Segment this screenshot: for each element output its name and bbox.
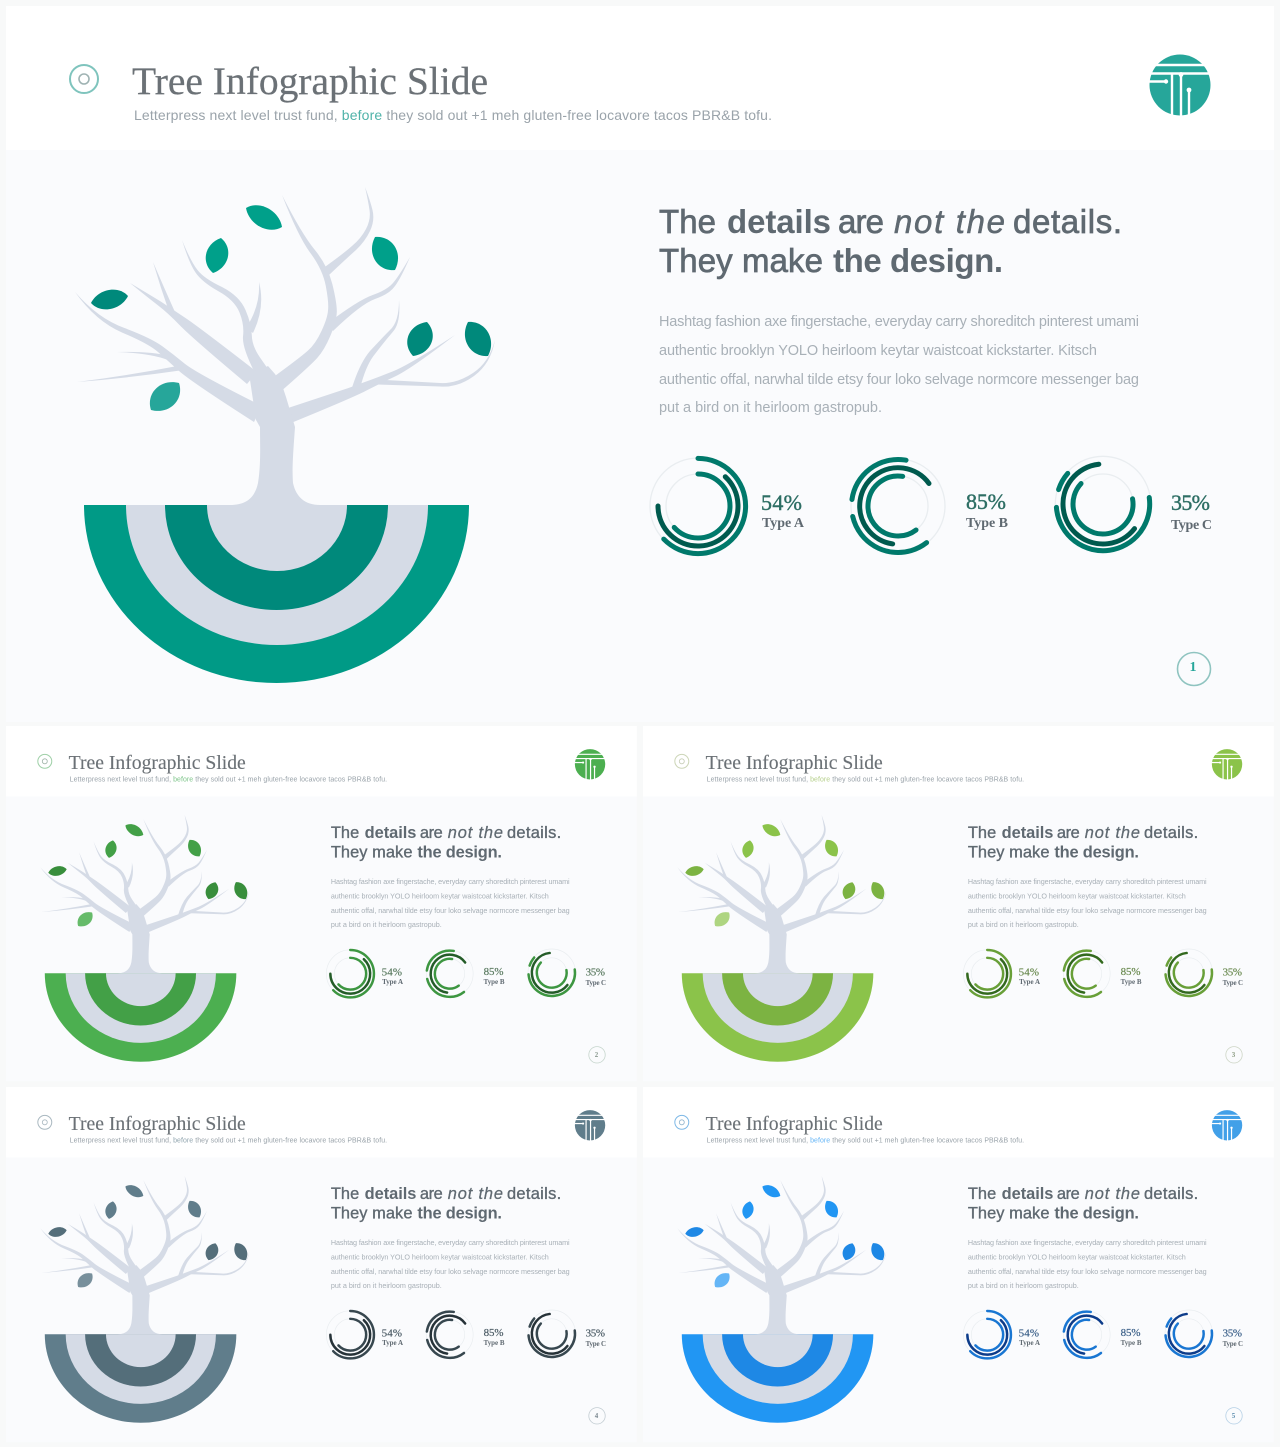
- chart: semicircle roots: [45, 973, 236, 1062]
- page number: [589, 1047, 605, 1063]
- heading: the design.: [1054, 843, 1139, 861]
- donut chart: Type B: [417, 941, 482, 1006]
- label: Type B: [1121, 1327, 1142, 1347]
- body text: [331, 877, 570, 929]
- slide 2: green panel: [6, 726, 637, 1081]
- heading: [659, 203, 1122, 279]
- heading: The: [659, 203, 716, 240]
- body text: put a bird on it heirloom gastropub.: [968, 920, 1079, 929]
- body text: Hashtag fashion axe fingerstache, everyday carry shoreditch pinterest umami: [968, 877, 1207, 886]
- body text: authentic brooklyn YOLO heirloom keytar waistcoat kickstarter. Kitsch: [968, 892, 1186, 901]
- label: Type B: 85%: [484, 966, 503, 978]
- body text: [331, 1238, 570, 1290]
- label: Type A: 54%: [382, 1328, 402, 1340]
- label: Type C: 35%: [1223, 967, 1242, 979]
- body text: authentic brooklyn YOLO heirloom keytar waistcoat kickstarter. Kitsch: [331, 892, 549, 901]
- heading: The: [331, 824, 359, 842]
- body text: authentic offal, narwhal tilde etsy four loko selvage normcore messenger bag: [331, 1267, 570, 1276]
- heading: [331, 1185, 561, 1222]
- heading: They make: [331, 843, 412, 861]
- label: Type A: [761, 490, 805, 531]
- label: Type C: [1223, 1328, 1243, 1348]
- donut chart: Type C: [1044, 445, 1162, 563]
- donut chart: Type A: [641, 449, 755, 563]
- illustration: tree with leaves: [75, 187, 495, 505]
- label: Type A: [382, 967, 403, 986]
- slide 4 background: [6, 1087, 637, 1442]
- icon: target circle: [675, 1115, 689, 1129]
- label: Type B: [484, 1327, 505, 1347]
- label: Type A: Type A: [382, 1339, 403, 1347]
- label: Type B: Type B: [1121, 1339, 1142, 1347]
- body text: authentic brooklyn YOLO heirloom keytar waistcoat kickstarter. Kitsch: [968, 1253, 1186, 1262]
- icon: target circle: [70, 65, 98, 93]
- icon: target circle: [38, 1115, 52, 1129]
- body text: authentic brooklyn YOLO heirloom keytar waistcoat kickstarter. Kitsch: [659, 343, 1097, 359]
- label: Type C: 35%: [1223, 1328, 1242, 1340]
- body text: [659, 314, 1139, 416]
- chart: semicircle roots: [682, 973, 873, 1062]
- heading: details: [1002, 1185, 1053, 1203]
- label: Type B: [1121, 966, 1142, 986]
- body text: put a bird on it heirloom gastropub.: [331, 1281, 442, 1290]
- body text: authentic offal, narwhal tilde etsy four loko selvage normcore messenger bag: [968, 906, 1207, 915]
- icon: tree logo: [1211, 749, 1243, 780]
- page number: [1178, 652, 1210, 686]
- chart: semicircle roots: [682, 1334, 873, 1423]
- title: Tree Infographic Slide: [706, 752, 883, 774]
- slide 5: blue panel: [643, 1087, 1274, 1442]
- title: Tree Infographic Slide: [69, 1113, 246, 1135]
- donut chart: Type B: [1054, 1302, 1119, 1367]
- heading: They make: [331, 1204, 412, 1222]
- label: Type C: Type C: [1171, 518, 1212, 533]
- icon: tree logo: [1211, 1110, 1243, 1141]
- label: Type A: Type A: [762, 516, 805, 531]
- label: Type A: [382, 1328, 403, 1347]
- illustration: tree with leaves: [677, 815, 886, 973]
- body text: authentic brooklyn YOLO heirloom keytar waistcoat kickstarter. Kitsch: [331, 1253, 549, 1262]
- label: Type A: Type A: [382, 978, 403, 986]
- label: Type C: [1223, 967, 1243, 987]
- heading: are: [420, 1185, 443, 1203]
- heading: not the: [1085, 824, 1140, 842]
- label: Type B: Type B: [484, 978, 505, 986]
- heading: not the: [1085, 1185, 1140, 1203]
- heading: the design.: [1054, 1204, 1139, 1222]
- label: Type A: 54%: [761, 490, 802, 515]
- donut chart: Type C: [522, 943, 581, 1002]
- slide 1: teal main panel: [6, 6, 1274, 722]
- slide 3 background: [643, 726, 1274, 1081]
- page number: [1226, 1047, 1242, 1063]
- subtitle: Letterpress next level trust fund, before they sold out +1 meh gluten-free locavore tacos PBR&B tofu.: [70, 777, 387, 784]
- illustration: tree with leaves: [40, 1176, 249, 1334]
- body text: authentic offal, narwhal tilde etsy four loko selvage normcore messenger bag: [968, 1267, 1207, 1276]
- heading: [968, 1185, 1198, 1222]
- page number: 4: [595, 1412, 599, 1420]
- body text: Hashtag fashion axe fingerstache, everyday carry shoreditch pinterest umami: [331, 1238, 570, 1247]
- subtitle: Letterpress next level trust fund, before they sold out +1 meh gluten-free locavore tacos PBR&B tofu.: [707, 1138, 1024, 1145]
- heading: They make: [659, 242, 823, 279]
- heading: details.: [507, 824, 561, 842]
- donut chart: Type B: [1054, 941, 1119, 1006]
- label: Type B: Type B: [1121, 978, 1142, 986]
- subtitle: Letterpress next level trust fund, before they sold out +1 meh gluten-free locavore tacos PBR&B tofu.: [134, 107, 772, 123]
- page number: 2: [595, 1051, 599, 1059]
- page number: [1226, 1408, 1242, 1424]
- heading: are: [838, 203, 884, 240]
- heading: [331, 824, 561, 861]
- slide 5 background: [643, 1087, 1274, 1442]
- body text: [968, 1238, 1207, 1290]
- illustration: tree with leaves: [40, 815, 249, 973]
- heading: are: [420, 824, 443, 842]
- heading: details: [365, 1185, 416, 1203]
- slide 2 background: [6, 726, 637, 1081]
- body text: put a bird on it heirloom gastropub.: [659, 400, 882, 416]
- label: Type A: 54%: [382, 967, 402, 979]
- label: Type B: 85%: [966, 489, 1006, 514]
- illustration: tree with leaves: [677, 1176, 886, 1334]
- donut chart: Type B: [417, 1302, 482, 1367]
- title: Tree Infographic Slide: [132, 59, 488, 103]
- heading: not the: [448, 824, 503, 842]
- label: Type C: [586, 967, 606, 987]
- label: Type B: 85%: [1121, 966, 1140, 978]
- donut chart: Type B: [833, 441, 963, 571]
- label: Type C: Type C: [586, 1340, 606, 1348]
- heading: details.: [1013, 203, 1122, 240]
- page number: 5: [1232, 1412, 1236, 1420]
- body text: Hashtag fashion axe fingerstache, everyday carry shoreditch pinterest umami: [331, 877, 570, 886]
- page number: 3: [1232, 1051, 1236, 1059]
- donut chart: Type A: [959, 1307, 1015, 1363]
- label: Type A: [1019, 1328, 1040, 1347]
- label: Type B: Type B: [484, 1339, 505, 1347]
- icon: tree logo: [574, 749, 606, 780]
- body text: authentic offal, narwhal tilde etsy four loko selvage normcore messenger bag: [659, 372, 1139, 388]
- heading: details.: [1144, 1185, 1198, 1203]
- subtitle: Letterpress next level trust fund, before they sold out +1 meh gluten-free locavore tacos PBR&B tofu.: [70, 1138, 387, 1145]
- icon: tree logo: [574, 1110, 606, 1141]
- slide 1 background: [6, 6, 1274, 722]
- heading: are: [1057, 824, 1080, 842]
- label: Type B: 85%: [1121, 1327, 1140, 1339]
- label: Type B: 85%: [484, 1327, 503, 1339]
- slide 4: slate panel: [6, 1087, 637, 1442]
- heading: not the: [448, 1185, 503, 1203]
- donut chart: Type C: [1159, 1304, 1218, 1363]
- icon: target circle: [675, 754, 689, 768]
- heading: details: [727, 203, 831, 240]
- label: Type C: Type C: [1223, 979, 1243, 987]
- label: Type B: [484, 966, 505, 986]
- donut chart: Type A: [322, 1307, 378, 1363]
- donut chart: Type C: [522, 1304, 581, 1363]
- heading: details.: [507, 1185, 561, 1203]
- heading: They make: [968, 1204, 1049, 1222]
- heading: They make: [968, 843, 1049, 861]
- label: Type C: 35%: [586, 1328, 605, 1340]
- subtitle: Letterpress next level trust fund, before they sold out +1 meh gluten-free locavore tacos PBR&B tofu.: [707, 777, 1024, 784]
- label: Type A: [1019, 967, 1040, 986]
- heading: the design.: [833, 242, 1003, 279]
- body text: Hashtag fashion axe fingerstache, everyday carry shoreditch pinterest umami: [968, 1238, 1207, 1247]
- heading: The: [968, 1185, 996, 1203]
- donut chart: Type A: [322, 946, 378, 1002]
- body text: [968, 877, 1207, 929]
- heading: [968, 824, 1198, 861]
- label: Type B: Type B: [966, 516, 1008, 531]
- body text: put a bird on it heirloom gastropub.: [968, 1281, 1079, 1290]
- heading: details: [365, 824, 416, 842]
- heading: details.: [1144, 824, 1198, 842]
- page number: 1: [1190, 660, 1196, 675]
- heading: the design.: [417, 843, 502, 861]
- icon: tree logo: [1148, 54, 1212, 116]
- donut chart: Type C: [1159, 943, 1218, 1002]
- chart: semicircle roots: [84, 505, 469, 683]
- label: Type C: Type C: [1223, 1340, 1243, 1348]
- body text: authentic offal, narwhal tilde etsy four loko selvage normcore messenger bag: [331, 906, 570, 915]
- label: Type C: 35%: [586, 967, 605, 979]
- label: Type A: 54%: [1019, 967, 1039, 979]
- page number: [589, 1408, 605, 1424]
- title: Tree Infographic Slide: [706, 1113, 883, 1135]
- heading: details: [1002, 824, 1053, 842]
- label: Type A: Type A: [1019, 1339, 1040, 1347]
- heading: The: [968, 824, 996, 842]
- label: Type A: 54%: [1019, 1328, 1039, 1340]
- donut chart: Type A: [959, 946, 1015, 1002]
- label: Type B: [966, 489, 1008, 531]
- slide 3: lime panel: [643, 726, 1274, 1081]
- chart: semicircle roots: [45, 1334, 236, 1423]
- label: Type A: Type A: [1019, 978, 1040, 986]
- body text: Hashtag fashion axe fingerstache, everyday carry shoreditch pinterest umami: [659, 314, 1139, 330]
- label: Type C: [586, 1328, 606, 1348]
- title: Tree Infographic Slide: [69, 752, 246, 774]
- heading: not the: [894, 203, 1005, 240]
- body text: put a bird on it heirloom gastropub.: [331, 920, 442, 929]
- label: Type C: 35%: [1171, 490, 1210, 515]
- heading: the design.: [417, 1204, 502, 1222]
- label: Type C: [1171, 490, 1212, 533]
- heading: The: [331, 1185, 359, 1203]
- heading: are: [1057, 1185, 1080, 1203]
- label: Type C: Type C: [586, 979, 606, 987]
- icon: target circle: [38, 754, 52, 768]
